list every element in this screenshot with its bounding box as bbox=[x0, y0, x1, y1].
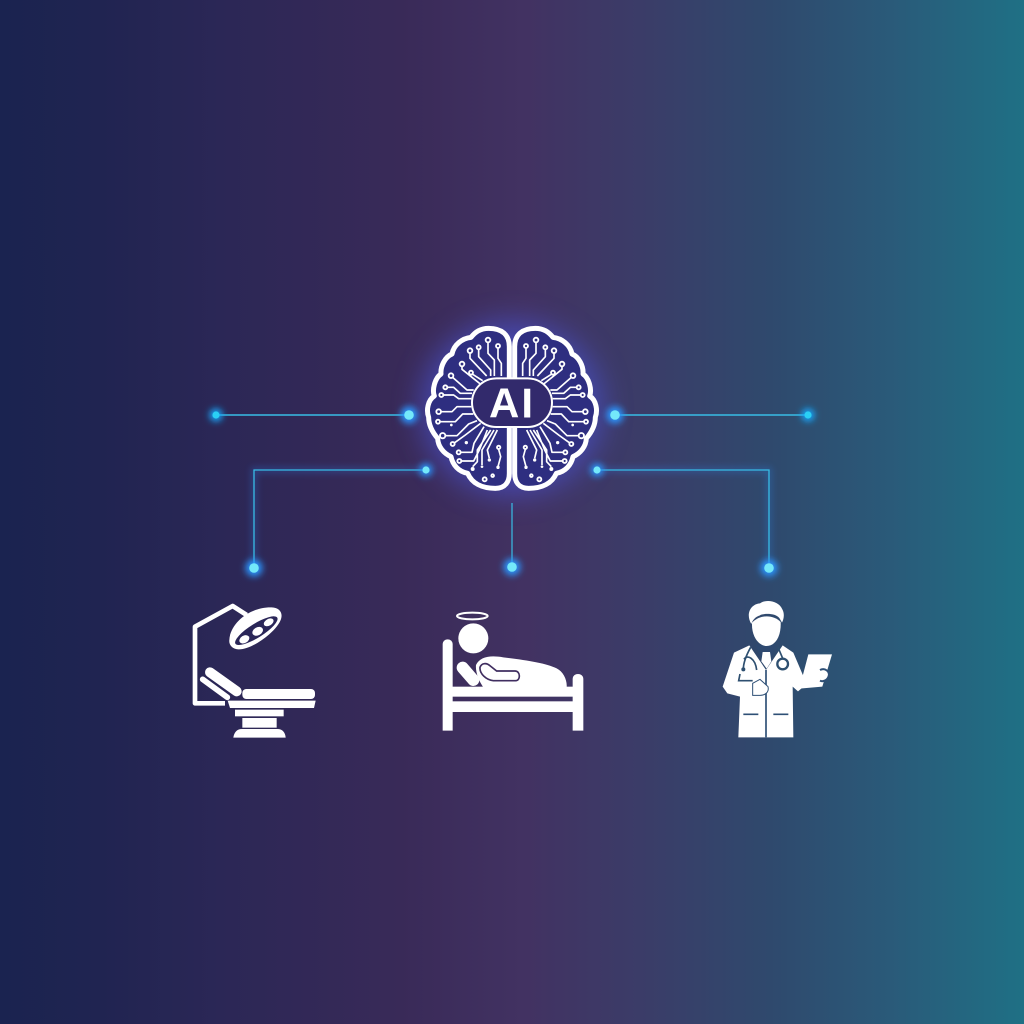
connector: brain to operating table bbox=[246, 464, 432, 576]
collar and tie bbox=[755, 645, 777, 669]
halo bbox=[457, 613, 488, 619]
connector: brain to doctor bbox=[590, 464, 778, 576]
bed frame bbox=[443, 639, 583, 731]
connector: upper right bbox=[606, 406, 814, 424]
icon: doctor with stethoscope and clipboard bbox=[723, 601, 832, 737]
left hemisphere bbox=[428, 328, 509, 488]
brain glow bbox=[420, 320, 604, 496]
head bbox=[458, 623, 488, 653]
clipboard bbox=[799, 654, 832, 689]
coat details bbox=[743, 670, 788, 737]
right hemisphere bbox=[515, 328, 596, 488]
stethoscope bbox=[739, 647, 788, 681]
patient body bbox=[463, 656, 567, 687]
AI badge bbox=[472, 378, 552, 427]
icon: AI circuit brain bbox=[428, 328, 596, 488]
AI badge: AI bbox=[489, 379, 535, 426]
connector: brain to patient bbox=[504, 503, 520, 576]
icon: patient in bed bbox=[443, 613, 583, 731]
coat bbox=[723, 645, 807, 737]
table bbox=[203, 672, 316, 738]
fist bbox=[753, 679, 768, 695]
head bbox=[749, 601, 784, 646]
icon: operating table with surgical lamp bbox=[195, 606, 316, 738]
connector: upper left bbox=[210, 406, 418, 424]
surgical lamp bbox=[229, 607, 282, 650]
lamp arm bbox=[195, 606, 247, 703]
